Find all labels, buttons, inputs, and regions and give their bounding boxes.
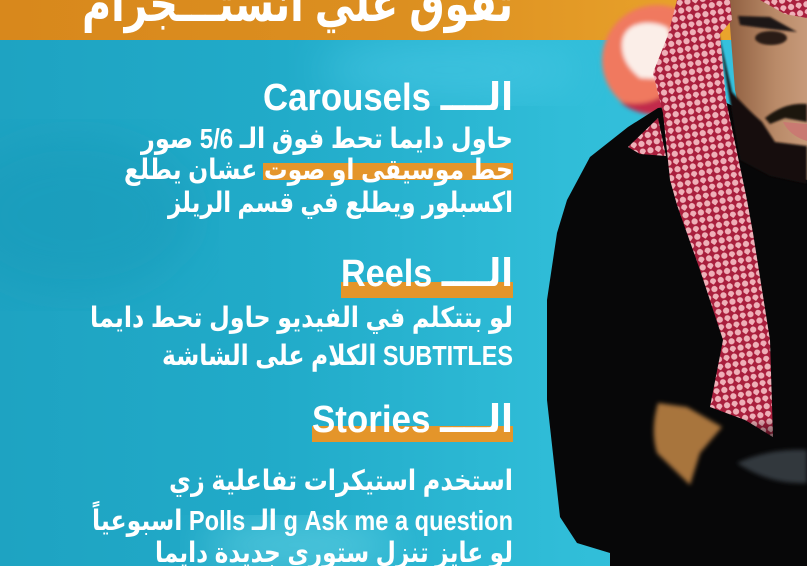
line 1: استخدم استيكرات تفاعلية زي (169, 465, 513, 497)
line 2: حط موسيقى او صوت عشان يطلع (124, 154, 513, 186)
face (728, 0, 807, 180)
line 3: اكسبلور ويطلع في قسم الريلز (166, 187, 513, 219)
line 1: حاول دايما تحط فوق الـ 5/6 صور (139, 123, 513, 155)
icon: red notification circle (602, 5, 712, 115)
line 2: SUBTITLES الكلام على الشاشة (162, 340, 513, 372)
heading: Carousels: الــــ Carousels (263, 77, 513, 119)
shemagh scarf (653, 0, 773, 437)
hand (654, 403, 722, 485)
line 1: لو بتتكلم في الفيديو حاول تحط دايما (90, 302, 513, 334)
heading: Stories: الــــ Stories (312, 399, 513, 441)
headband (760, 0, 807, 18)
highlight (263, 163, 513, 180)
sleeve highlight (737, 450, 807, 483)
orange title band (0, 0, 807, 40)
scarf fade (710, 340, 773, 437)
robe (547, 100, 807, 566)
section: Stories (92, 399, 513, 566)
eye (755, 31, 787, 45)
heading: Reels: الــــ Reels (341, 253, 513, 295)
heading underline (312, 426, 513, 442)
lips (783, 122, 807, 141)
mustache (765, 104, 807, 124)
eyebrow (738, 16, 797, 32)
heading underline (341, 282, 513, 298)
section: Reels (90, 253, 513, 372)
line 2: Ask me a question ‏g‏ الـ Polls اسبوعياً (92, 500, 513, 537)
beard (718, 30, 807, 184)
person illustration (547, 0, 807, 566)
section: Carousels (124, 77, 513, 219)
shoulder scarf fold (628, 118, 666, 156)
